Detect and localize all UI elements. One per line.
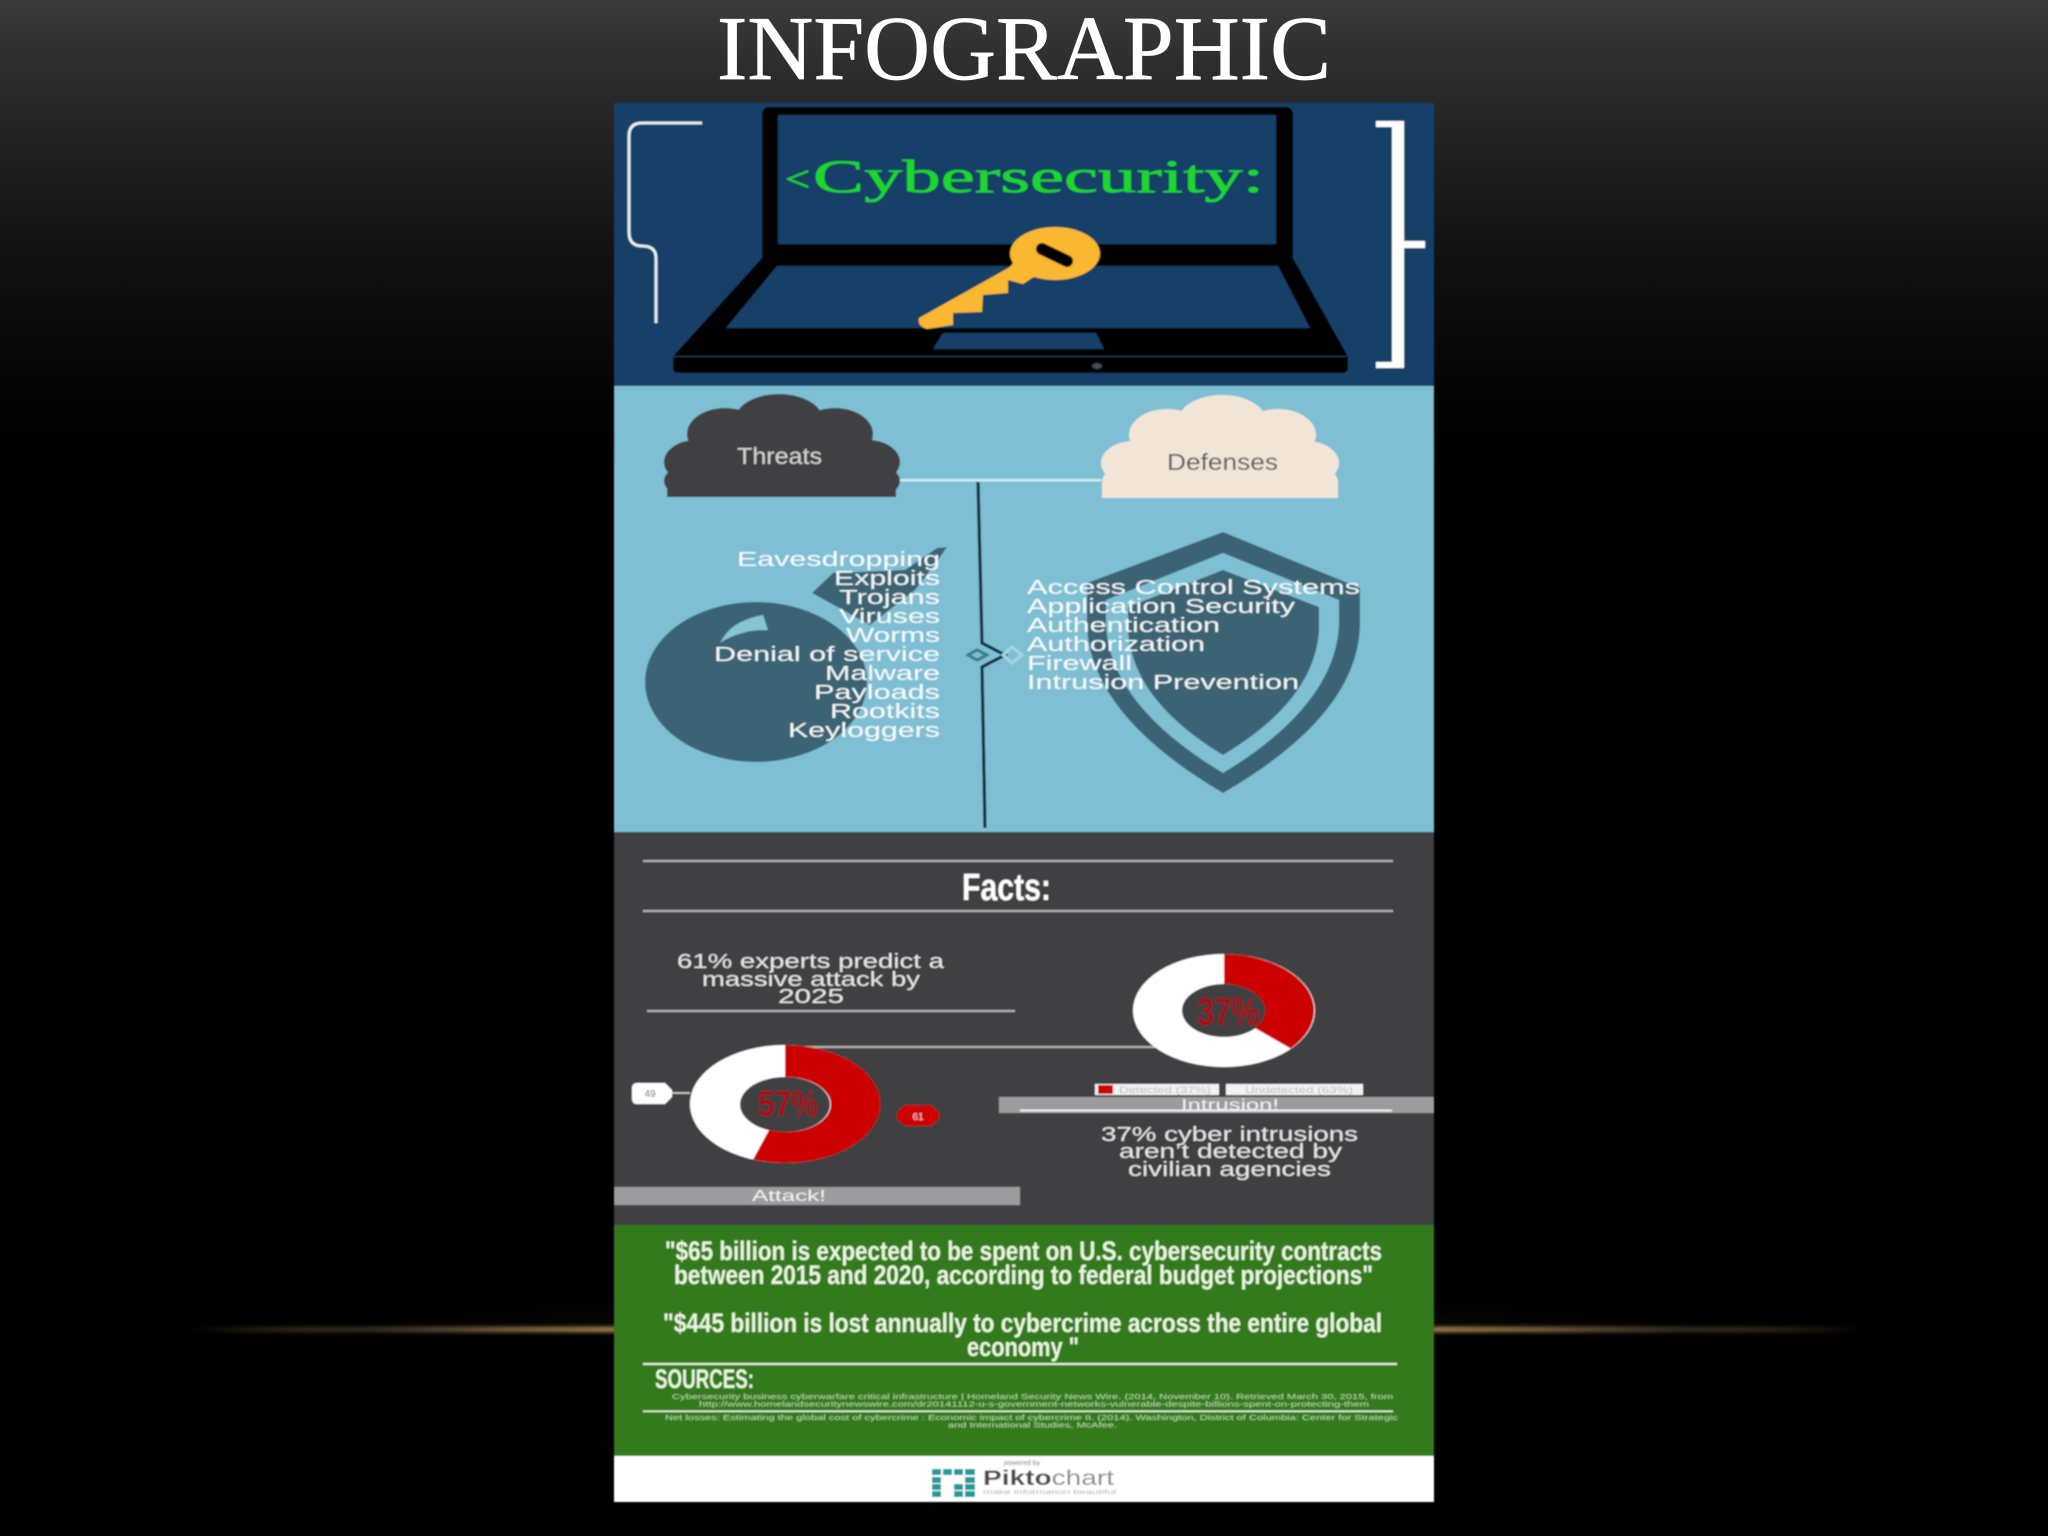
list: threats: Viruses <box>839 606 940 628</box>
sources divider <box>643 1410 1393 1412</box>
list: threats <box>714 549 940 742</box>
quote: 65 billion: "$65 billion is expected to be spent on U.S. cybersecurity contracts <box>665 1236 1382 1266</box>
chart legend: Detected (37%) <box>1119 1085 1211 1095</box>
text: citation one: http://www.homelandsecuritynewswire.com/dr20141112-u-s-government-networks-vulnerable-despite-billions-spent-on-protecting-them <box>699 1400 1369 1408</box>
chart legend: Undetected (63%) <box>1245 1085 1353 1095</box>
list: defenses <box>1027 577 1360 694</box>
quote: 65 billion: between 2015 and 2020, according to federal budget projections" <box>674 1260 1373 1290</box>
text: powered by: powered by <box>1004 1460 1041 1467</box>
list: defenses: Authentication <box>1027 615 1220 637</box>
icon: key <box>919 227 1100 329</box>
text: piktochart wordmark: Pikto chart <box>983 1467 1114 1490</box>
donut chart: intrusions 37%: 37% <box>1197 991 1259 1034</box>
quote: 65 billion <box>665 1236 1382 1290</box>
quote: 445 billion <box>663 1308 1382 1362</box>
tag: 61 <box>897 1105 939 1126</box>
quote: 445 billion: "$445 billion is lost annually to cybercrime across the entire global <box>663 1308 1382 1338</box>
cloud: defenses: Defenses <box>1167 449 1278 475</box>
chart legend <box>1095 1084 1363 1095</box>
donut chart: intrusions 37% <box>1133 954 1315 1067</box>
list: defenses: Application Security <box>1027 596 1295 618</box>
bar: intrusion: Intrusion! <box>1181 1097 1279 1114</box>
panel: facts <box>614 832 1434 1225</box>
list: defenses: Intrusion Prevention <box>1027 672 1299 694</box>
panel: cybersecurity header <box>614 103 1434 387</box>
donut chart: attack 57% <box>690 1045 880 1163</box>
heading rules <box>643 860 1393 1048</box>
quote: 445 billion: economy " <box>967 1332 1079 1362</box>
text: logo tagline: make information beautiful <box>983 1489 1117 1496</box>
connector lines <box>897 479 1101 828</box>
bar: intrusion <box>999 1097 1434 1114</box>
donut chart: attack 57%: 57% <box>758 1083 818 1124</box>
text: intrusion fact: aren’t detected by <box>1119 1141 1342 1163</box>
text: citation two: and International Studies, McAfee. <box>948 1420 1117 1430</box>
list: threats: Eavesdropping <box>737 549 940 571</box>
text: attack fact <box>677 951 945 1008</box>
laptop screen text: < <box>785 159 810 199</box>
text: citation one: Cybersecurity business cyberwarfare critical infrastructure | Homeland Security News Wire. (2014, November 10). Retrieved March 30, 2015, from <box>672 1392 1393 1401</box>
list: threats: Payloads <box>814 682 940 704</box>
title: INFOGRAPHIC <box>717 0 1331 99</box>
list: defenses: Access Control Systems <box>1027 577 1360 599</box>
sources rule <box>643 1363 1397 1365</box>
text: citation two: Net losses: Estimating the global cost of cybercrime : Economic impact of cybercrime II. (2014). Washington, District of Columbia: Center for Strategic <box>665 1413 1398 1422</box>
list: threats: Keyloggers <box>788 720 940 742</box>
text: attack fact: 61% experts predict a <box>677 951 945 973</box>
list: threats: Denial of service <box>714 644 940 666</box>
list: defenses: Firewall <box>1027 653 1132 675</box>
panel: footer <box>614 1456 1434 1502</box>
text: intrusion fact: civilian agencies <box>1128 1159 1331 1181</box>
icon: laptop <box>673 107 1348 373</box>
panel: threats and defenses <box>614 386 1434 832</box>
list: threats: Rootkits <box>830 701 940 723</box>
text: attack fact: massive attack by <box>702 969 920 991</box>
icon: piktochart logo <box>932 1469 975 1497</box>
text: intrusion fact: 37% cyber intrusions <box>1101 1124 1358 1146</box>
icon: chevrons <box>968 647 1022 663</box>
list: threats: Exploits <box>834 568 940 590</box>
bar: attack <box>614 1187 1020 1205</box>
tag: 49: 49 <box>644 1089 656 1100</box>
laptop screen text: Cybersecurity: <box>813 151 1264 203</box>
list: threats: Trojans <box>839 587 940 609</box>
text: intrusion fact <box>1101 1124 1358 1181</box>
floor glow line <box>190 1240 1860 1332</box>
icon: right bracket <box>1376 121 1425 368</box>
cloud: threats: Threats <box>737 443 822 469</box>
bar: attack: Attack! <box>752 1188 826 1205</box>
text: attack fact: 2025 <box>778 986 844 1008</box>
list: threats: Worms <box>846 625 940 647</box>
text: citation one <box>672 1392 1393 1408</box>
heading: facts: Facts: <box>962 867 1051 909</box>
text: citation two <box>665 1413 1398 1430</box>
tag: 49 <box>632 1083 690 1104</box>
icon: bomb <box>645 547 947 762</box>
panel: budget quotes and sources <box>614 1225 1434 1456</box>
icon: left curly brace <box>629 123 702 323</box>
icon: shield <box>1087 532 1360 793</box>
list: defenses: Authorization <box>1027 634 1205 656</box>
cloud: defenses <box>1101 395 1339 498</box>
laptop screen text <box>785 151 1264 203</box>
tag: 61: 61 <box>912 1112 924 1123</box>
cloud: threats <box>664 394 900 497</box>
infographic poster <box>614 103 1434 1502</box>
heading: sources: SOURCES: <box>655 1364 754 1394</box>
list: threats: Malware <box>825 663 940 685</box>
